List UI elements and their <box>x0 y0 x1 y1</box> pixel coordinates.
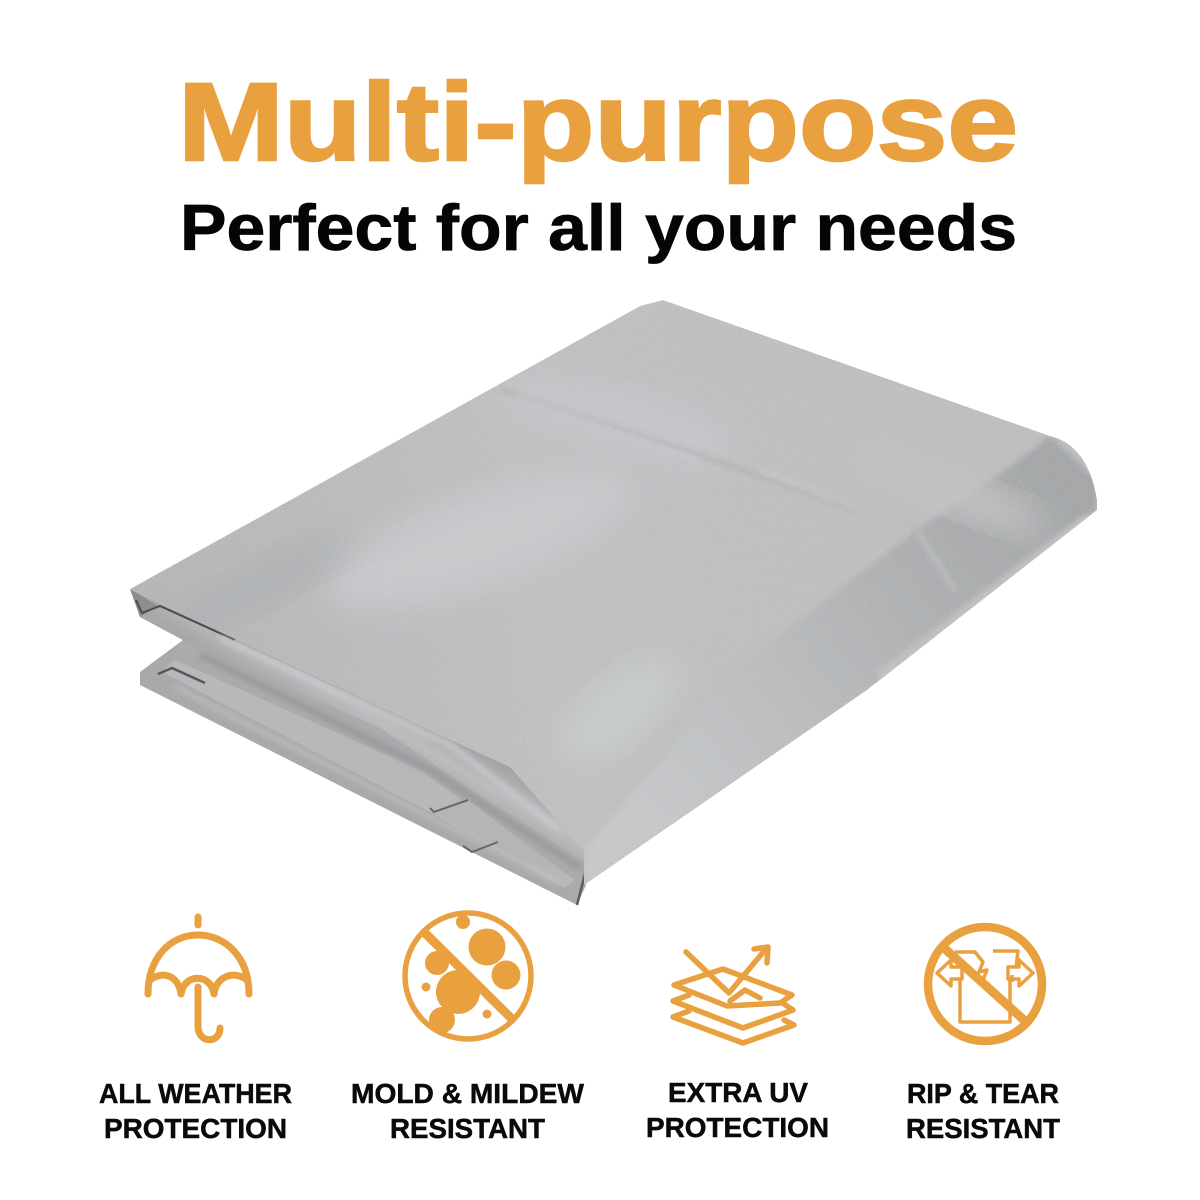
feature: all weather protection <box>99 917 292 1144</box>
icon: layers with reflected arrow <box>673 947 794 1043</box>
top face of tarp <box>120 290 1110 910</box>
lower fold stack <box>130 589 586 905</box>
right corner lit strip <box>880 518 1090 678</box>
label: PROTECTION <box>646 1112 829 1143</box>
center crease <box>503 390 750 472</box>
icon: no mold <box>405 913 531 1039</box>
label: RESISTANT <box>390 1113 545 1144</box>
lit highlights <box>339 485 606 604</box>
inside of folded opening <box>130 589 158 617</box>
label: EXTRA UV <box>668 1077 809 1108</box>
label: RESISTANT <box>906 1113 1060 1144</box>
label: PROTECTION <box>104 1113 287 1144</box>
folded silver tarp <box>120 290 1110 910</box>
label: RIP & TEAR <box>907 1078 1059 1109</box>
subtitle: Perfect for all your needs <box>180 191 1017 264</box>
feature: rip and tear resistant <box>906 927 1060 1144</box>
label: ALL WEATHER <box>99 1078 292 1109</box>
feature: extra UV protection <box>646 947 829 1143</box>
icon: no tearing shirt <box>928 927 1042 1041</box>
label: MOLD & MILDEW <box>351 1078 584 1109</box>
right folded band <box>584 436 1097 890</box>
upper fold under the top sheet <box>140 606 584 862</box>
feature: mold and mildew resistant <box>351 913 584 1144</box>
title: Multi-purpose <box>178 61 1018 184</box>
icon: umbrella <box>148 917 249 1040</box>
